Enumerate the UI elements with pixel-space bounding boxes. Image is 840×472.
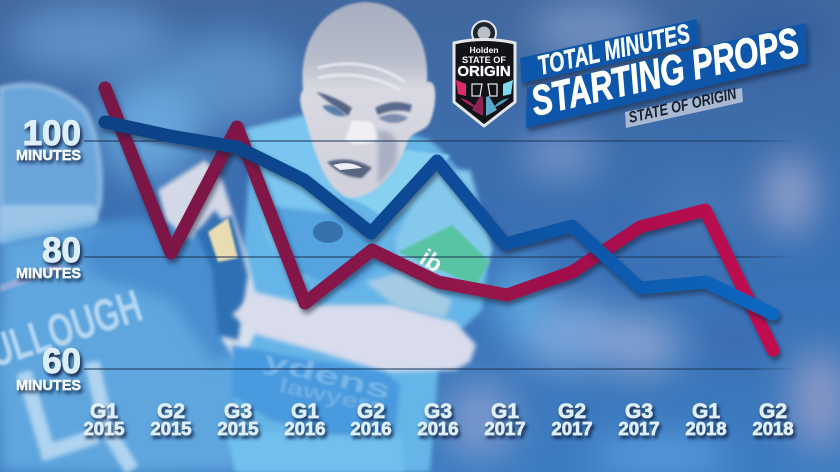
main player xyxy=(158,2,492,472)
x-axis labels: G3 xyxy=(625,400,653,423)
x-axis labels: 2015 xyxy=(150,418,192,439)
logo: Holden State of Origin: ORIGIN xyxy=(457,63,511,80)
line chart: maroon series xyxy=(105,88,773,350)
subtitle tag: state of origin: STATE OF ORIGIN xyxy=(627,86,738,127)
x-axis labels: G2 xyxy=(157,400,185,423)
x-axis labels: G1 xyxy=(90,400,118,423)
collar xyxy=(340,150,450,222)
label: 80 minutes: MINUTES xyxy=(16,266,81,282)
x-axis labels: G1 xyxy=(291,400,319,423)
chest shirt xyxy=(262,205,385,290)
label: 80 minutes: 80 xyxy=(42,231,81,270)
x-axis labels: 2016 xyxy=(350,418,392,439)
label: 100 minutes xyxy=(16,114,81,164)
canterbury badge xyxy=(313,221,343,243)
main player: lawyers xyxy=(277,374,387,419)
x-axis labels: G2 xyxy=(558,400,586,423)
label: 80 minutes xyxy=(16,231,81,282)
sleeve right xyxy=(395,170,492,282)
x-axis labels: G3 xyxy=(424,400,452,423)
title banner: total minutes xyxy=(520,18,699,83)
torso xyxy=(232,345,400,436)
x-axis labels: 2018 xyxy=(752,418,794,439)
x-axis labels: 2015 xyxy=(217,418,259,439)
sponsor band xyxy=(398,225,490,285)
x-axis labels: 2016 xyxy=(417,418,459,439)
x-axis labels: G1 xyxy=(491,400,519,423)
head xyxy=(300,2,435,198)
x-axis labels: G3 xyxy=(224,400,252,423)
main player: ydens xyxy=(261,345,394,405)
line chart: blue series xyxy=(105,122,773,314)
title banner: total minutes: TOTAL MINUTES xyxy=(535,18,693,81)
x-axis labels: 2017 xyxy=(618,418,660,439)
forearm xyxy=(232,292,476,372)
grid lines xyxy=(84,141,800,369)
x-axis labels: 2017 xyxy=(551,418,593,439)
x-axis labels: G2 xyxy=(759,400,787,423)
label: 60 minutes xyxy=(16,342,81,394)
back player xyxy=(0,84,250,472)
x-axis labels xyxy=(83,400,794,439)
label: 100 minutes: 100 xyxy=(23,114,81,153)
x-axis labels: 2018 xyxy=(685,418,727,439)
x-axis labels: 2016 xyxy=(284,418,326,439)
y-axis labels xyxy=(16,114,81,394)
left arm xyxy=(158,160,262,365)
logo: Holden State of Origin: Holden xyxy=(469,45,499,55)
label: 100 minutes: MINUTES xyxy=(16,148,81,164)
logo: Holden State of Origin xyxy=(454,21,515,126)
x-axis labels: 2015 xyxy=(83,418,125,439)
x-axis labels: G2 xyxy=(357,400,385,423)
logo: Holden State of Origin: STATE OF xyxy=(462,55,506,65)
label: 60 minutes: 60 xyxy=(42,342,81,381)
x-axis labels: 2017 xyxy=(484,418,526,439)
x-axis labels: G1 xyxy=(692,400,720,423)
label: 60 minutes: MINUTES xyxy=(16,378,81,394)
main player: ib xyxy=(415,244,447,278)
